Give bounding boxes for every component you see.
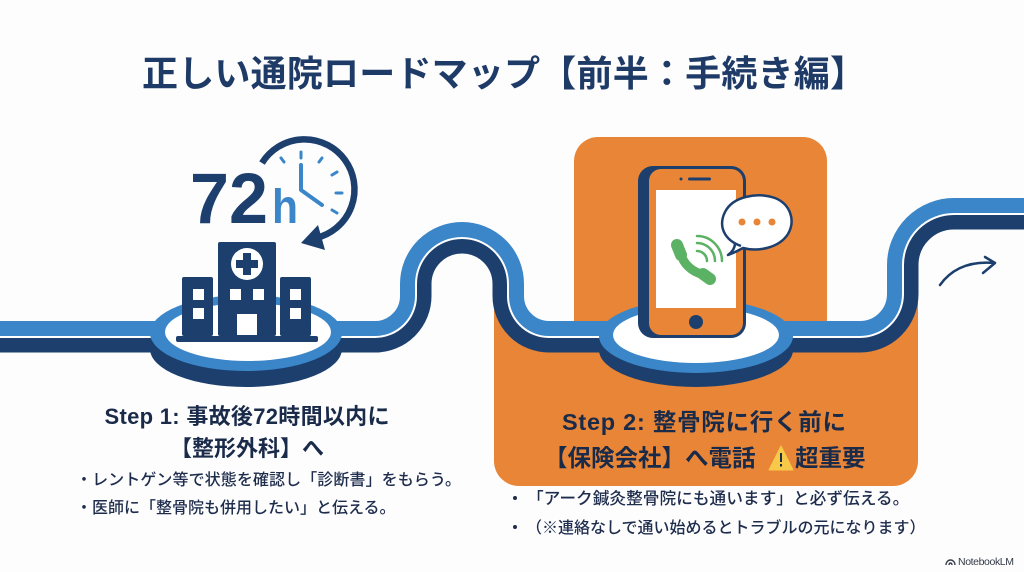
icon: warning xyxy=(769,446,793,470)
step 1 heading: 【整形外科】へ xyxy=(170,436,324,461)
step 2 platform xyxy=(599,299,793,387)
icon: hospital xyxy=(176,242,318,342)
step 1 bullets: ・医師に「整骨院も併用したい」と伝える。 xyxy=(76,499,396,517)
step 1 bullets xyxy=(76,470,461,517)
step 2 heading xyxy=(544,409,866,471)
step 2 heading: 超重要 xyxy=(795,445,866,471)
title: 正しい通院ロードマップ【前半：手続き編】 xyxy=(142,53,866,94)
step 2 bullets xyxy=(513,489,926,537)
step 1 heading xyxy=(104,404,390,461)
icon: 72h clock: h xyxy=(272,181,298,234)
icon: 72h clock xyxy=(190,139,354,250)
step 1 platform xyxy=(150,295,342,387)
step 2 heading: Step 2: 整骨院に行く前に xyxy=(562,409,846,435)
icon: 72h clock: 72 xyxy=(190,160,268,239)
icon: smartphone call xyxy=(638,166,746,338)
step 1 bullets: ・レントゲン等で状態を確認し「診断書」をもらう。 xyxy=(76,470,461,489)
NotebookLM mark: NotebookLM xyxy=(958,556,1014,568)
step 1 heading: Step 1: 事故後72時間以内に xyxy=(104,404,390,429)
icon: speech bubble xyxy=(722,195,792,255)
arrow: next step xyxy=(940,257,995,285)
step 2 bullets: （※連絡なしで通い始めるとトラブルの元になります） xyxy=(526,518,926,537)
step 2 bullets: 「アーク鍼灸整骨院にも通います」と必ず伝える。 xyxy=(527,489,909,508)
roadmap road xyxy=(0,206,1024,345)
step 2 heading: 【保険会社】へ電話 xyxy=(544,445,756,471)
panel: step 2 highlight xyxy=(494,137,918,486)
